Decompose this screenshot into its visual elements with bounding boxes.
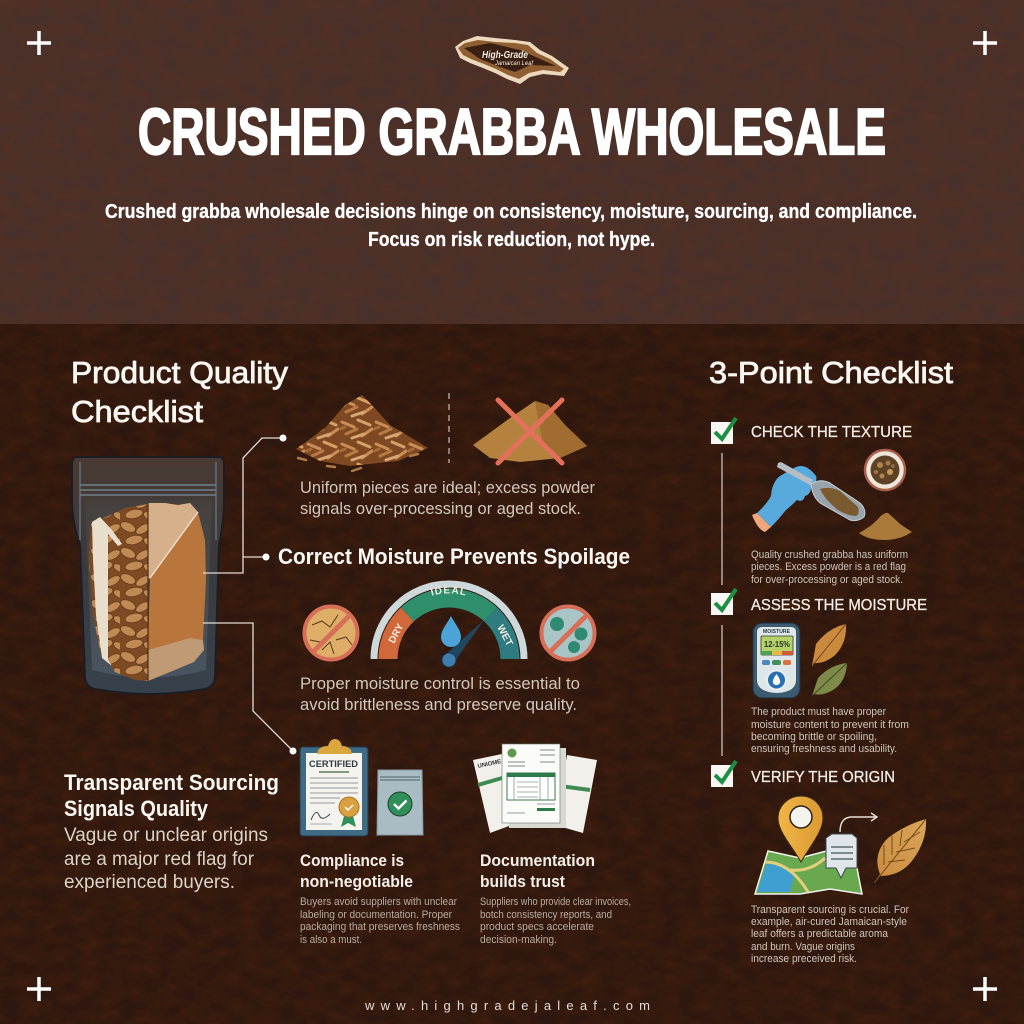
pouch left half: uniform pieces — [89, 504, 148, 681]
documentation body: botch consistency reports, and — [480, 909, 612, 921]
icon: certified clipboard — [300, 739, 368, 836]
icon: stacked documents — [473, 744, 597, 833]
text: moisture description: ensuring freshness and usability. — [751, 743, 897, 755]
location pin — [778, 796, 823, 862]
text: texture description: Quality crushed grabba has uniform — [751, 549, 908, 561]
subtitle — [105, 201, 917, 251]
sourcing heading: Transparent Sourcing — [64, 770, 279, 795]
text: uniform pieces: Uniform pieces are ideal; excess powder — [300, 478, 595, 497]
connector lines from pouch — [203, 434, 296, 754]
compliance heading: Compliance is — [300, 851, 404, 870]
text block: transparent sourcing — [64, 770, 279, 893]
compliance body — [300, 896, 460, 946]
text: texture description — [751, 549, 908, 586]
text: moisture description: becoming brittle or spoiling, — [751, 731, 877, 743]
icon: moisture meter: MOISTURE — [763, 629, 790, 635]
heading: assess the moisture: ASSESS THE MOISTURE — [751, 597, 927, 614]
compliance heading: non-negotiable — [300, 872, 413, 891]
timeline lines — [721, 453, 723, 756]
scoop handle — [777, 462, 813, 485]
blue glove — [757, 466, 816, 527]
text: origin description: leaf offers a predictable aroma — [751, 928, 889, 940]
document tag — [826, 834, 857, 878]
icon: split pouch of crushed leaf — [72, 457, 224, 694]
checkbox 2 — [711, 589, 736, 615]
pouch right half upper: light powder — [148, 503, 198, 580]
documentation heading: builds trust — [480, 872, 565, 891]
text: moisture description — [751, 706, 909, 755]
text: origin description — [751, 904, 909, 965]
curved arrow — [840, 813, 877, 832]
icon: certified clipboard: CERTIFIED — [309, 759, 359, 769]
heading: product quality checklist: Checklist — [71, 394, 203, 429]
footer url: www.highgradejaleaf.com — [364, 998, 650, 1013]
text: origin description: example, air-cured Jamaican-style — [751, 916, 907, 928]
chart: moisture gauge — [370, 580, 528, 668]
dashed divider — [448, 393, 450, 463]
sourcing body: experienced buyers. — [64, 872, 235, 893]
compliance body: is also a must. — [300, 934, 362, 946]
gauge outer rim — [374, 584, 524, 659]
scoop body — [811, 481, 865, 521]
documentation heading: Documentation — [480, 851, 595, 870]
sourcing heading: Signals Quality — [64, 796, 209, 821]
gauge dry zone — [388, 614, 407, 659]
text: moisture control: avoid brittleness and preserve quality. — [300, 695, 577, 714]
text: origin description: increase preceived risk. — [751, 953, 857, 965]
documentation body — [480, 896, 631, 946]
documentation heading — [480, 851, 595, 891]
text: texture description: for over-processing or aged stock. — [751, 574, 903, 586]
icon: stacked documents: UNIOME — [477, 759, 502, 770]
icon: dry and moldy leaves — [812, 624, 847, 696]
text: moisture description: The product must have proper — [751, 706, 886, 718]
gauge labels: DRY — [387, 622, 407, 645]
gauge ideal zone — [407, 598, 491, 614]
subtitle: Focus on risk reduction, not hype. — [368, 229, 655, 251]
icon: tobacco leaf — [874, 819, 926, 883]
icon: mold prohibited — [542, 606, 594, 660]
text: moisture control — [300, 674, 580, 714]
heading: product quality checklist: Product Quality — [71, 355, 289, 390]
gauge labels: IDEAL — [430, 586, 466, 596]
icon: gloved hand with scoop — [752, 462, 865, 532]
gauge labels: WET — [494, 623, 514, 648]
icon: small powder pile — [859, 513, 912, 540]
text: documentation — [480, 851, 631, 946]
logo: Jamaica leaf silhouette — [455, 36, 569, 84]
gauge needle — [445, 620, 484, 664]
pouch right half bottom — [148, 638, 204, 681]
icon: powder pile with red cross — [473, 400, 587, 463]
sourcing body — [64, 825, 268, 893]
text: texture description: pieces. Excess powder is a red flag — [751, 561, 906, 573]
heading: correct moisture: Correct Moisture Prevents Spoilage — [278, 544, 630, 569]
text: origin description: and burn. Vague origins — [751, 941, 855, 953]
lower panel background — [0, 324, 1024, 1024]
compliance heading — [300, 851, 413, 891]
icon: uniform leaf pieces pile — [296, 395, 428, 471]
icon: moisture meter: 12-15% — [764, 639, 790, 649]
compliance body: labeling or documentation. Proper — [300, 909, 452, 921]
checkbox 3 — [711, 761, 736, 787]
logo: Jamaica leaf silhouette: High-Grade — [482, 50, 528, 61]
subtitle: Crushed grabba wholesale decisions hinge on consistency, moisture, sourcing, and compliance. — [105, 201, 917, 223]
gauge labels — [387, 586, 514, 648]
compliance body: Buyers avoid suppliers with unclear — [300, 896, 457, 908]
scoop contents — [820, 488, 859, 516]
text: moisture control: Proper moisture control is essential to — [300, 674, 580, 693]
heading: product quality checklist — [71, 355, 289, 429]
header panel background — [0, 0, 1024, 324]
icon: moisture meter — [753, 623, 800, 698]
pouch right half middle: tan leaf — [148, 512, 206, 650]
gauge water drop — [441, 616, 461, 647]
documentation body: Suppliers who provide clear invoices, — [480, 896, 631, 908]
gauge wet zone — [491, 614, 510, 659]
documentation body: product specs accelerate — [480, 921, 594, 933]
icon: map with pin and tag — [755, 796, 877, 894]
icon: dry leaf prohibited — [304, 606, 358, 660]
wrist — [752, 513, 771, 532]
heading: 3-point checklist: 3-Point Checklist — [709, 355, 953, 390]
checkbox 1 — [711, 418, 736, 444]
pouch white sleeve strip — [92, 517, 122, 666]
text: moisture description: moisture content to prevent it from — [751, 719, 909, 731]
documentation body: decision-making. — [480, 934, 557, 946]
icon: sealed pouch with check — [377, 770, 423, 835]
map — [755, 850, 862, 894]
text: uniform pieces: signals over-processing or aged stock. — [300, 499, 581, 518]
sourcing heading — [64, 770, 279, 821]
text: compliance — [300, 851, 460, 946]
logo: Jamaica leaf silhouette: Jamaican Leaf — [494, 61, 534, 67]
heading: verify the origin: VERIFY THE ORIGIN — [751, 769, 895, 786]
text: uniform pieces — [300, 478, 595, 518]
compliance body: packaging that preserves freshness — [300, 921, 460, 933]
text: origin description: Transparent sourcing is crucial. For — [751, 904, 909, 916]
sourcing body: are a major red flag for — [64, 849, 255, 870]
heading: check the texture: CHECK THE TEXTURE — [751, 424, 912, 441]
sourcing body: Vague or unclear origins — [64, 825, 268, 846]
icon: magnified sample circle — [865, 450, 905, 490]
